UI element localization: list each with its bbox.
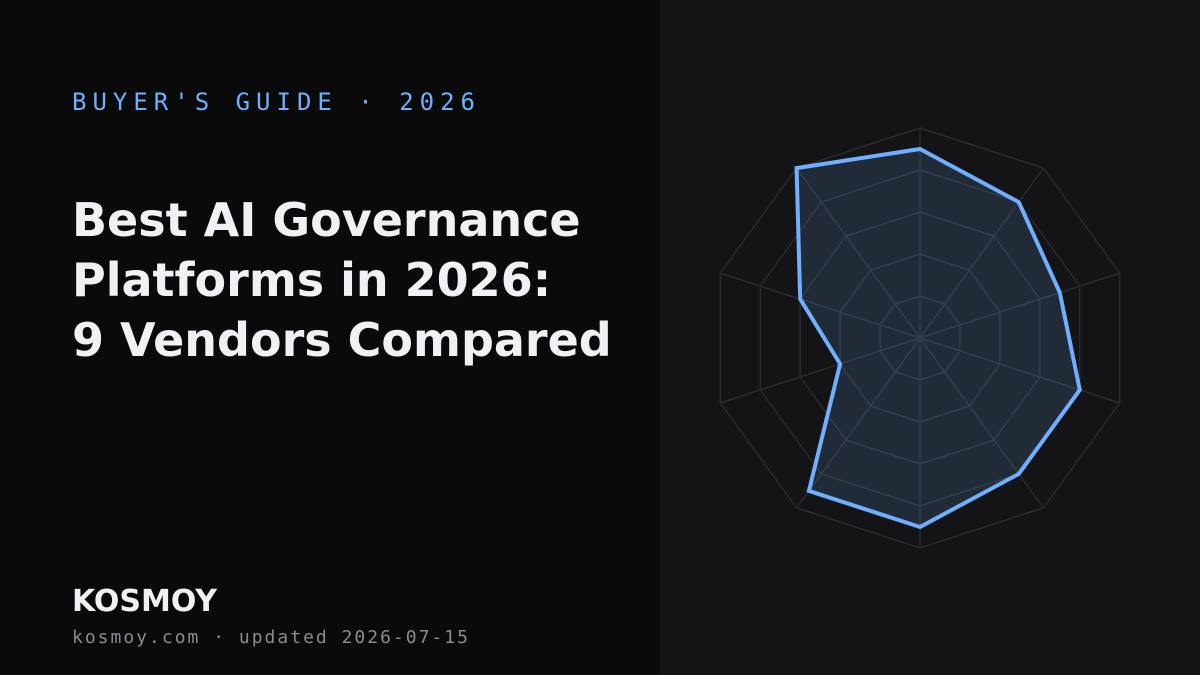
radar chart — [720, 127, 1120, 548]
eyebrow label: BUYER'S GUIDE · 2026 — [72, 88, 481, 116]
brand name: KOSMOY — [72, 584, 217, 619]
panel: right chart background — [660, 0, 1200, 675]
radar grid — [720, 128, 1120, 548]
footer: site and update date: kosmoy.com · updated 2026-07-15 — [72, 627, 470, 648]
title: Best AI Governance Platforms in 2026: 9 Vendors Compared — [72, 193, 612, 367]
radar data shape — [797, 149, 1080, 527]
